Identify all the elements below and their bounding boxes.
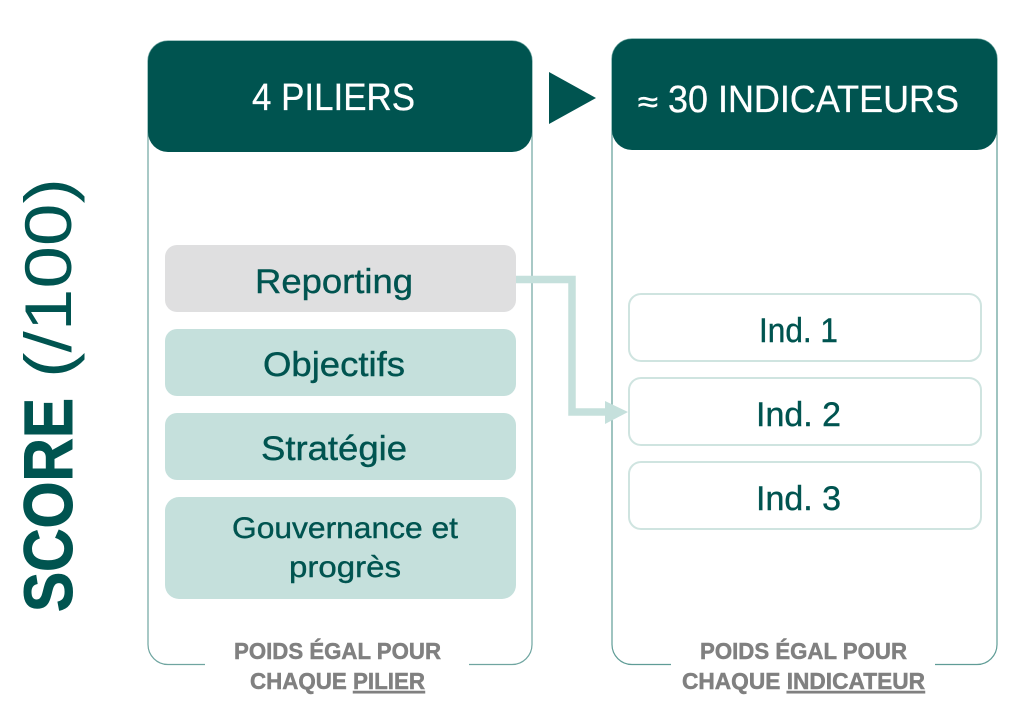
vertical title: score out of 100: (/100) (11, 178, 85, 378)
vertical title: score out of 100: SCORE (10, 398, 87, 612)
panel outline (148, 41, 532, 664)
pillar: Gouvernance et progrès: progrès (289, 551, 401, 584)
arrow: Reporting to Ind. 2 (516, 280, 628, 424)
caption: poids égal pour chaque indicateur: CHAQUE INDICATEUR (682, 668, 925, 694)
pillar: Stratégie: Stratégie (261, 430, 407, 468)
pillar: Objectifs (165, 329, 516, 396)
header: 30 indicateurs: 30 INDICATEURS (668, 79, 959, 121)
caption: poids égal pour chaque pilier: POIDS ÉGAL POUR (234, 637, 441, 664)
pillar: Reporting: Reporting (255, 263, 413, 301)
indicator: Ind. 3: Ind. 3 (756, 480, 841, 518)
indicator: Ind. 1: Ind. 1 (759, 312, 838, 350)
header: 30 indicateurs (612, 39, 997, 150)
header: 4 piliers (148, 41, 532, 152)
pillar: Objectifs: Objectifs (263, 346, 405, 384)
pillar: Reporting (165, 245, 516, 312)
caption: poids égal pour chaque pilier: CHAQUE PILIER (250, 668, 425, 694)
panel: 4 piliers (148, 41, 532, 694)
indicator: Ind. 2: Ind. 2 (756, 396, 841, 434)
arrow: from piliers to indicateurs (549, 72, 596, 124)
vertical title: score out of 100 (10, 178, 87, 612)
caption: poids égal pour chaque indicateur (682, 637, 925, 694)
panel outline (612, 39, 997, 664)
indicator: Ind. 2 (629, 378, 981, 445)
pillar: Gouvernance et progrès: Gouvernance et (232, 512, 459, 545)
pillar: Stratégie (165, 413, 516, 480)
indicator: Ind. 1 (629, 294, 981, 361)
header: 4 piliers: 4 PILIERS (252, 77, 415, 119)
header: 30 indicateurs: ≈ (638, 86, 658, 119)
panel: 30 indicateurs (612, 39, 997, 694)
caption: poids égal pour chaque pilier (234, 637, 441, 694)
pillar: Gouvernance et progrès (165, 497, 516, 599)
caption: poids égal pour chaque indicateur: POIDS ÉGAL POUR (700, 637, 907, 664)
indicator: Ind. 3 (629, 462, 981, 529)
